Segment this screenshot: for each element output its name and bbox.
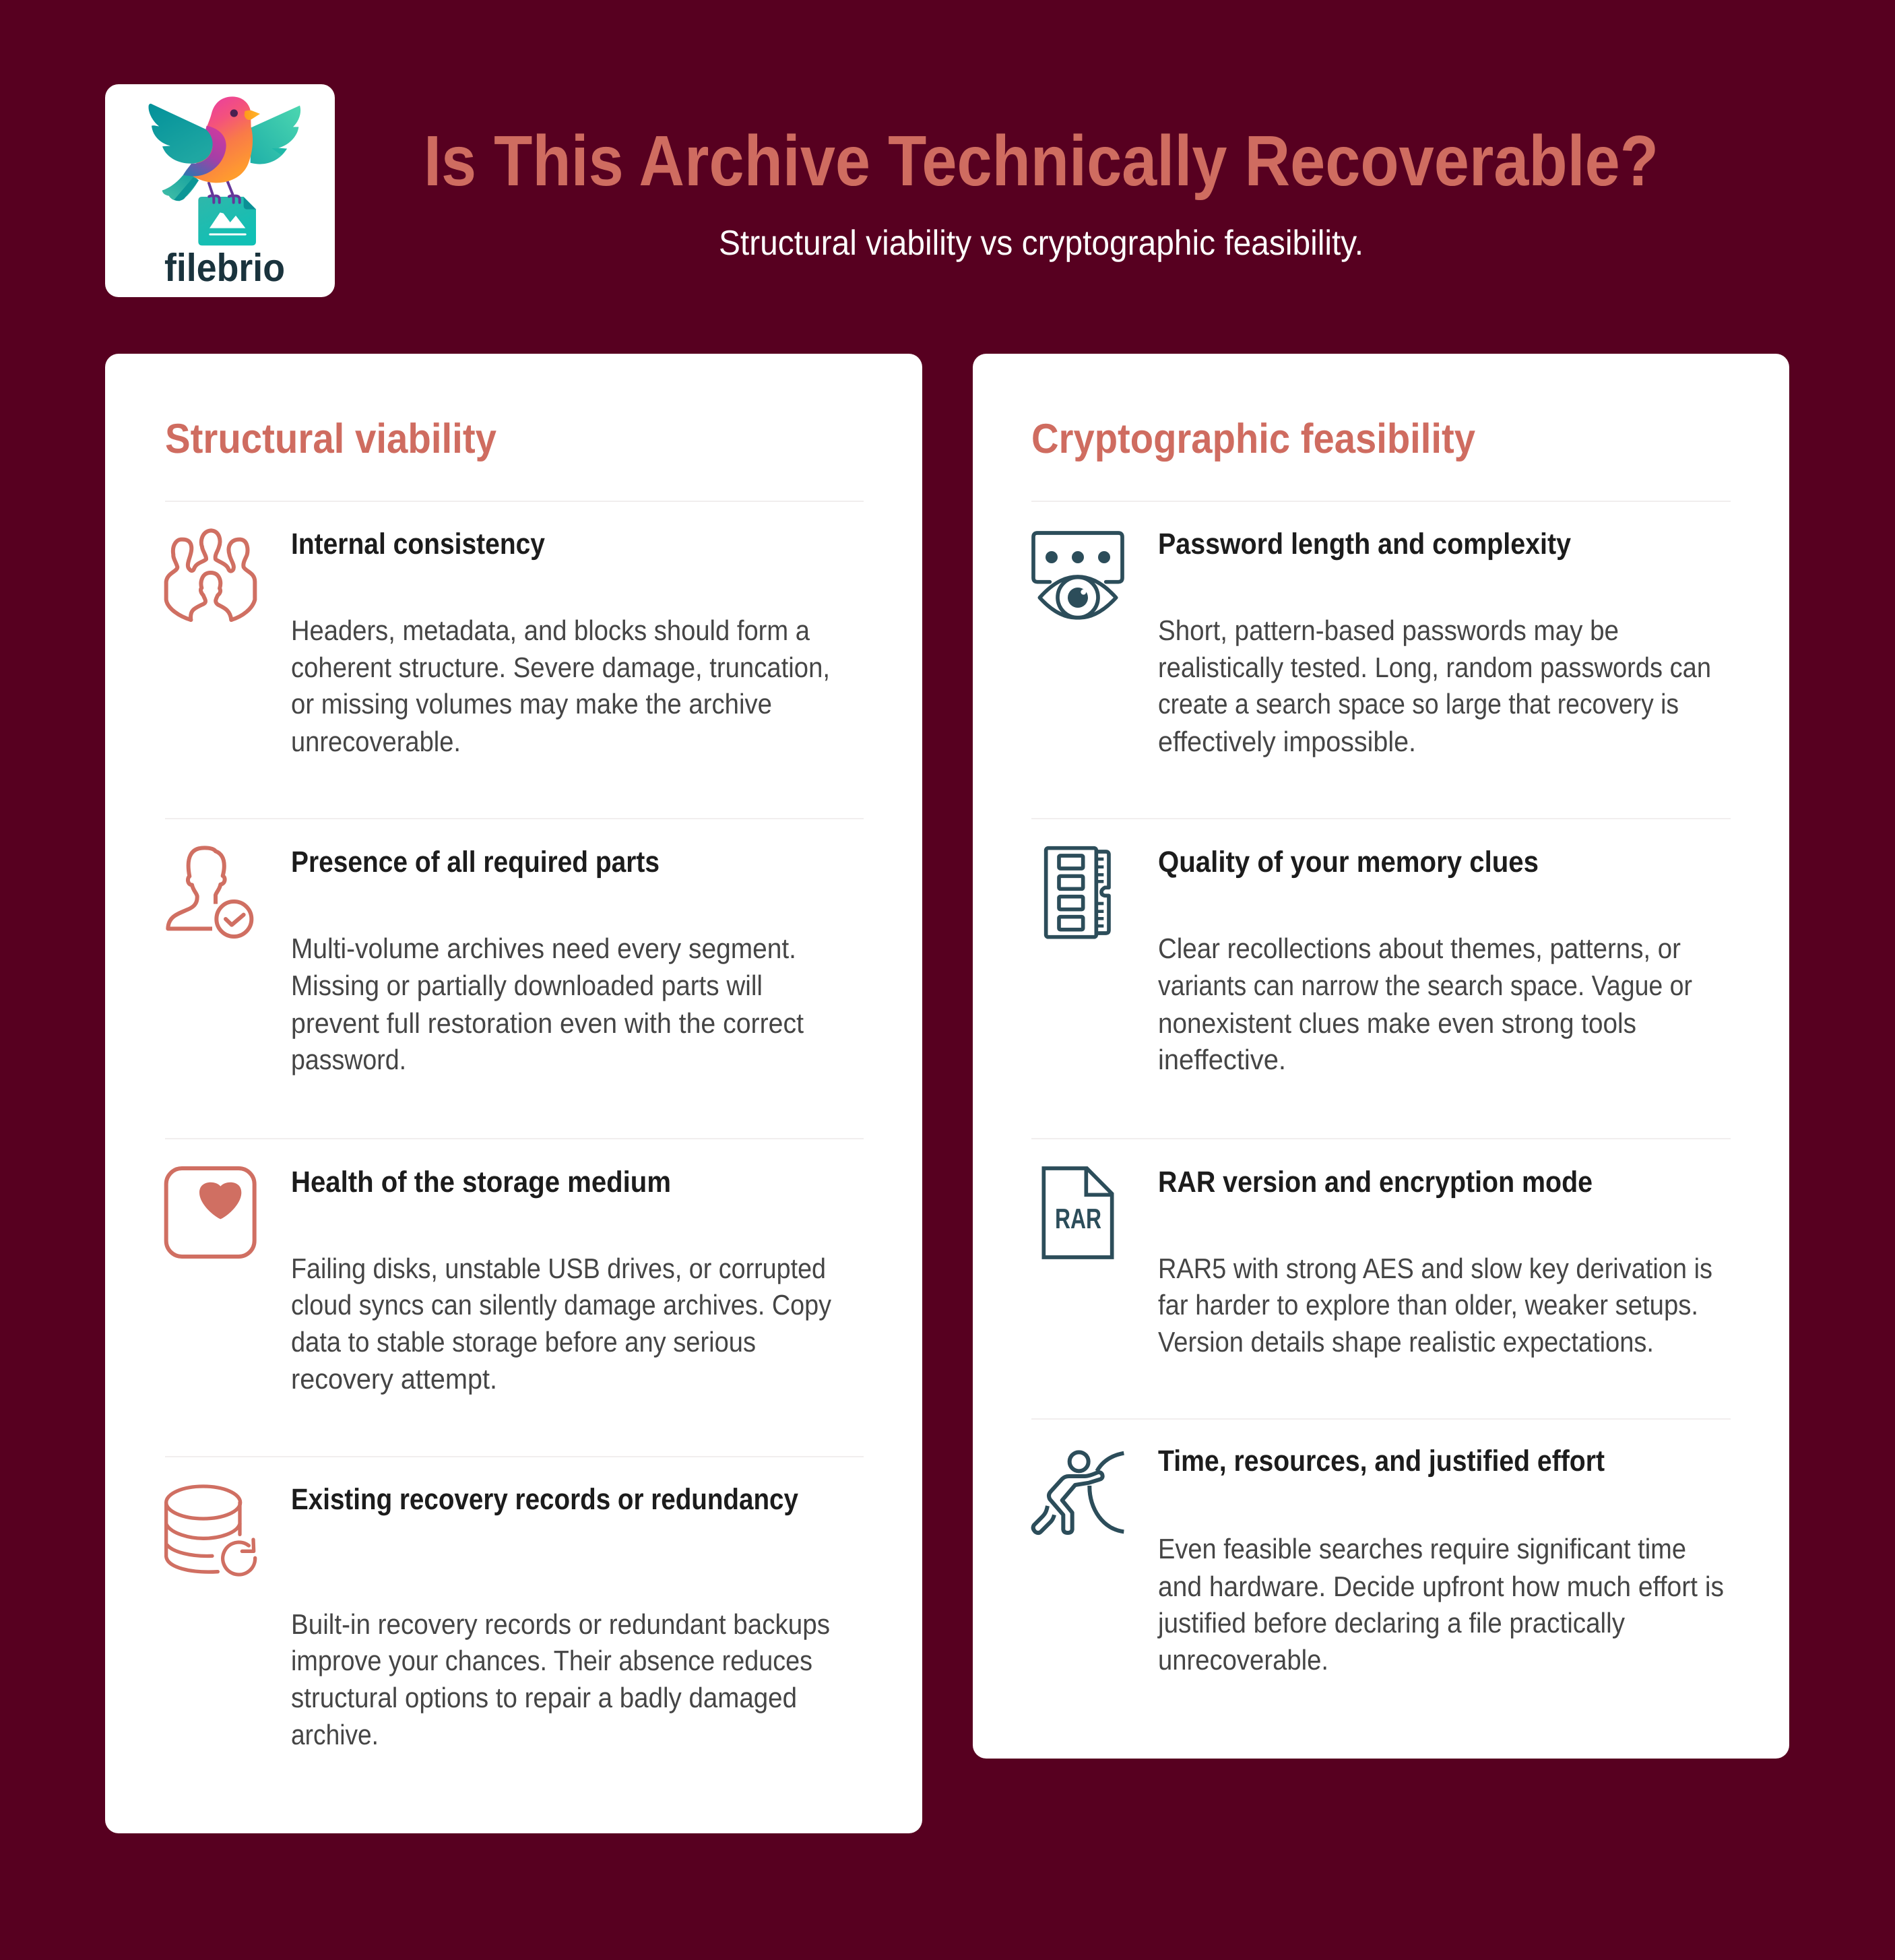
item title: Time, resources, and justified effort [1158,1445,1605,1478]
item body: structural options to repair a badly damaged [291,1682,797,1713]
title: Is This Archive Technically Recoverable? [424,121,1659,201]
item: password length and complexity [1033,528,1711,757]
panel: structural viability [105,354,922,1833]
item: existing recovery records [166,1483,830,1750]
item: presence of all required parts [168,846,804,1075]
item body: Version details shape realistic expectations. [1158,1326,1654,1358]
logo wordmark: filebrio [164,246,285,290]
item: time, resources, and justified effort [1033,1445,1724,1676]
item body: unrecoverable. [1158,1644,1328,1676]
item title: Password length and complexity [1158,528,1571,561]
item body: archive. [291,1719,379,1750]
icon: database with refresh [166,1486,255,1575]
item body: Multi-volume archives need every segment. [291,932,796,964]
item: health of the storage medium [166,1166,831,1395]
item body [1157,1533,1724,1676]
item body: unrecoverable. [291,726,461,757]
icon: RAR file [1043,1168,1112,1257]
item body: far harder to explore than older, weaker setups. [1158,1289,1698,1321]
item body: create a search space so large that recovery is [1158,688,1679,720]
item body: nonexistent clues make even strong tools [1158,1007,1636,1039]
item body [291,932,804,1075]
item body: recovery attempt. [291,1363,497,1395]
item body: Built-in recovery records or redundant backups [291,1608,830,1640]
subtitle: Structural viability vs cryptographic feasibility. [719,224,1363,263]
item body: data to stable storage before any serious [291,1326,756,1358]
item body: Clear recollections about themes, patterns, or [1158,932,1681,964]
item title: Existing recovery records or redundancy [291,1483,798,1516]
item title: RAR version and encryption mode [1158,1166,1593,1199]
item body [291,1253,831,1395]
item body [291,1608,830,1750]
item body: justified before declaring a file practically [1157,1607,1625,1639]
item: quality of your memory clues [1046,846,1692,1075]
icon: RAR file: RAR [1055,1203,1101,1234]
item body: Headers, metadata, and blocks should form a [291,614,810,646]
item title: Health of the storage medium [291,1166,671,1199]
item body: password. [291,1044,406,1075]
item body: cloud syncs can silently damage archives. Copy [291,1289,831,1321]
item title: Internal consistency [291,528,545,561]
item body: realistically tested. Long, random passwords can [1158,652,1711,683]
icon: group of people [166,530,255,620]
heading: structural viability: Structural viability [165,416,496,462]
item body: Even feasible searches require significant time [1158,1533,1686,1564]
logo card: filebrio [105,84,335,297]
item body: improve your chances. Their absence reduces [291,1645,812,1676]
item body: Short, pattern-based passwords may be [1158,614,1619,646]
item: internal consistency [166,528,830,757]
item body: coherent structure. Severe damage, truncation, [291,652,830,683]
item body: and hardware. Decide upfront how much effort is [1158,1571,1724,1602]
item body [1158,1253,1712,1358]
item body: variants can narrow the search space. Vague or [1158,970,1692,1001]
icon: password box with eye [1033,533,1122,618]
item body [1158,932,1692,1075]
heading: cryptographic feasibility: Cryptographic feasibility [1031,416,1475,462]
icon: memory module [1046,848,1109,937]
item body [1158,614,1711,757]
item body: RAR5 with strong AES and slow key derivation is [1158,1253,1712,1284]
item body: Missing or partially downloaded parts will [291,970,763,1001]
item title: Quality of your memory clues [1158,846,1539,879]
item body: Failing disks, unstable USB drives, or corrupted [291,1253,826,1284]
item title: Presence of all required parts [291,846,660,879]
item body: ineffective. [1158,1044,1286,1075]
icon: heart in rounded square [166,1168,255,1257]
icon: bird on file [149,96,300,245]
item body: prevent full restoration even with the correct [291,1007,804,1039]
icon: person with check [168,848,251,937]
icon: person pushing boulder [1033,1452,1124,1533]
item body: or missing volumes may make the archive [291,688,772,720]
item: rar version and encryption mode [1043,1166,1712,1358]
item body [291,614,830,757]
item body: effectively impossible. [1158,726,1416,757]
panel: cryptographic feasibility [973,354,1789,1759]
